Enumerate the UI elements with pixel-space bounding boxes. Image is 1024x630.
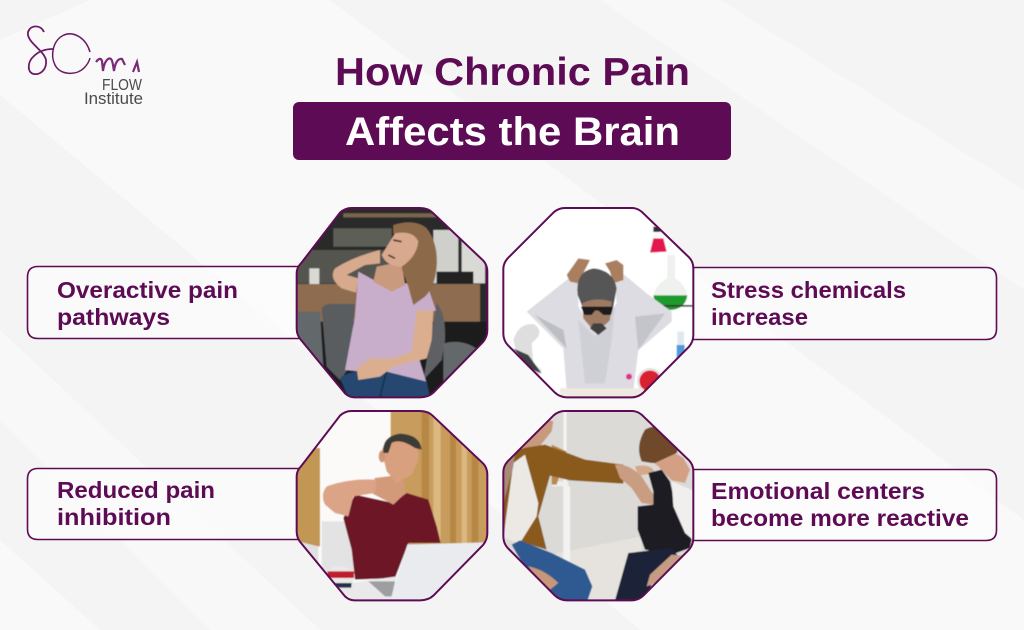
octagon frame xyxy=(503,208,693,397)
label box xyxy=(692,470,996,540)
label text: Stress chemicals xyxy=(711,277,906,303)
title banner: Affects the Brain xyxy=(345,110,680,154)
label text: Reduced pain xyxy=(57,477,215,503)
panel: stress chemicals increase xyxy=(495,200,996,405)
panel: emotional centers xyxy=(495,403,996,610)
title line 1: How Chronic Pain xyxy=(335,51,690,94)
panel: reduced pain inhibition xyxy=(28,408,493,605)
title xyxy=(293,51,731,160)
label box xyxy=(692,268,996,340)
logo wordmark xyxy=(84,77,143,108)
photo: stressed scientist xyxy=(502,207,694,398)
label text: Emotional centers xyxy=(711,478,925,504)
label text: become more reactive xyxy=(711,505,969,531)
photo: woman holding neck xyxy=(293,205,493,402)
logo wordmark: FLOW xyxy=(102,77,143,94)
photo: comforting a distressed person xyxy=(502,410,694,602)
label text: pathways xyxy=(57,304,170,330)
panel: overactive pain pathways xyxy=(28,205,493,402)
octagon frame xyxy=(297,411,487,600)
label text: increase xyxy=(711,304,808,330)
photo: man at laptop holding neck xyxy=(293,408,493,605)
label text: inhibition xyxy=(57,504,171,530)
label box xyxy=(28,266,300,338)
logo: SOMA Flow Institute xyxy=(28,26,143,108)
title banner xyxy=(293,102,731,160)
logo wordmark: Institute xyxy=(84,89,143,108)
label text: Overactive pain xyxy=(57,277,238,303)
label box xyxy=(28,468,300,540)
octagon frame xyxy=(297,208,487,397)
octagon frame xyxy=(503,411,693,600)
